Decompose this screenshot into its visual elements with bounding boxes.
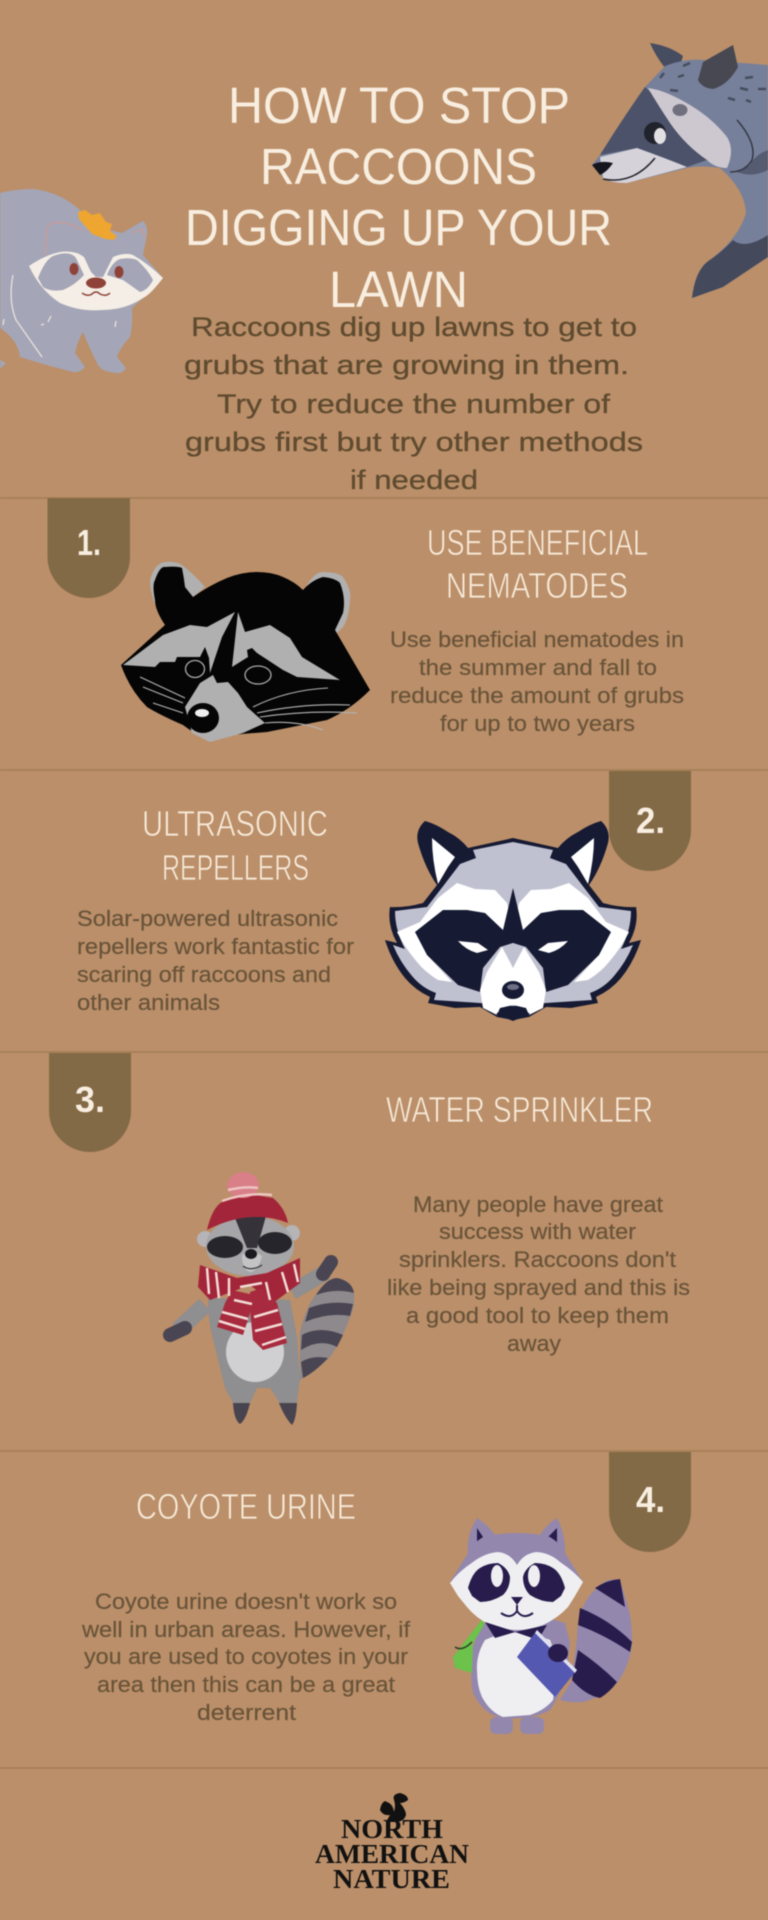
body text: area then this can be a great [97,1672,395,1697]
number badge 2: 2. [636,800,665,841]
body text: like being sprayed and this is [387,1275,690,1300]
body text: well in urban areas. However, if [81,1617,411,1642]
panel: step 2 ultrasonic repellers [77,771,691,1021]
title: HOW TO STOP [228,77,570,134]
number badge 1 [48,498,130,598]
panel: step 4 coyote urine [81,1452,691,1734]
panel: step 1 beneficial nematodes [48,498,684,742]
intro text: grubs that are growing in them. [184,350,629,380]
body text [390,627,684,736]
heading: ULTRASONIC [142,803,328,844]
panel: header [0,43,768,495]
number badge 3 [49,1053,131,1152]
intro text: Raccoons dig up lawns to get to [191,312,637,342]
heading: USE BENEFICIAL [427,522,648,563]
number badge 1: 1. [77,522,101,563]
body text: you are used to coyotes in your [84,1644,408,1669]
body text: away [507,1331,561,1356]
number badge 3: 3. [75,1079,105,1120]
logo: North American Nature: NORTH [341,1814,443,1844]
body text: success with water [439,1219,636,1244]
body text: repellers work fantastic for [77,934,354,959]
body text: Use beneficial nematodes in [390,627,684,652]
body text: deterrent [197,1700,296,1725]
icon: squirrel [380,1793,408,1822]
body text: a good tool to keep them [406,1303,669,1328]
illustration: gray raccoon with leaf at left [0,189,163,373]
intro text [184,312,643,495]
heading: COYOTE URINE [136,1486,356,1527]
body text: sprinklers. Raccoons don't [399,1247,676,1272]
intro text: if needed [350,465,478,495]
title: RACCOONS [260,138,537,195]
illustration: purple raccoon with book and bag [450,1518,632,1734]
number badge 4: 4. [636,1479,665,1520]
title: DIGGING UP YOUR [185,199,612,256]
number badge 2 [609,771,691,871]
body text: reduce the amount of grubs [390,683,684,708]
illustration: black raccoon face [121,562,370,742]
body text: Coyote urine doesn't work so [95,1589,397,1614]
heading [427,522,648,606]
intro text: Try to reduce the number of [217,389,611,419]
heading: NEMATODES [446,565,628,606]
body text: Solar-powered ultrasonic [77,906,338,931]
body text [81,1589,411,1725]
body text: scaring off raccoons and [77,962,331,987]
body text [77,906,354,1015]
heading: WATER SPRINKLER [386,1089,653,1130]
panel: step 3 water sprinkler [49,1053,690,1425]
body text: other animals [77,990,220,1015]
logo: North American Nature: NATURE [333,1864,450,1894]
title [185,77,612,318]
title: LAWN [329,261,468,318]
number badge 4 [609,1452,691,1552]
body text: for up to two years [440,711,635,736]
illustration: raccoon in red hat and scarf [170,1172,354,1425]
body text: the summer and fall to [419,655,657,680]
logo: North American Nature [315,1793,470,1894]
body text: Many people have great [413,1192,663,1217]
illustration: navy mascot raccoon face [385,821,641,1021]
heading: REPELLERS [162,847,309,888]
illustration: raccoon peeking from top right [592,43,768,298]
body text [387,1192,690,1356]
logo: North American Nature: AMERICAN [315,1839,470,1869]
heading [142,803,328,888]
intro text: grubs first but try other methods [185,427,643,457]
